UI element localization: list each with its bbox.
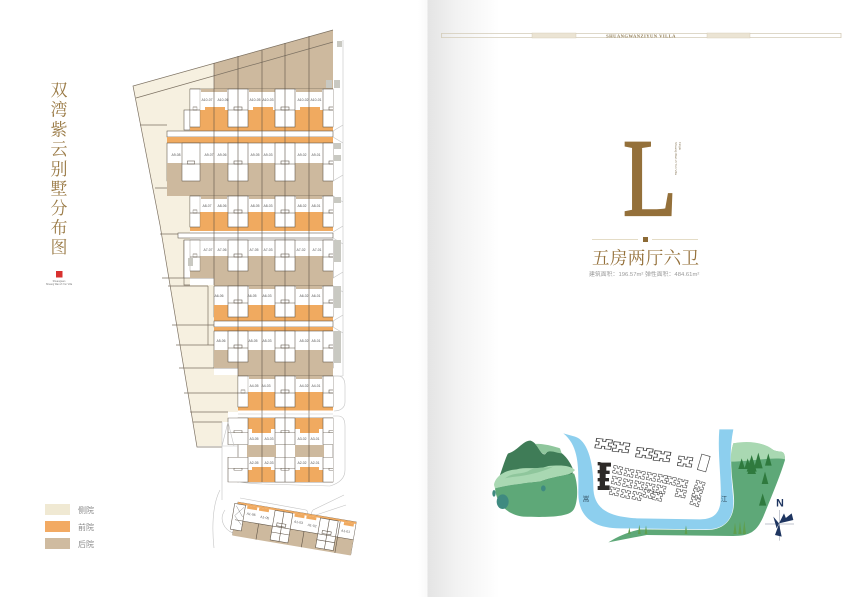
unit labels: A7-05: [249, 248, 259, 252]
orange front yards: [200, 107, 333, 482]
unit labels: A7-02: [296, 248, 306, 252]
unit labels: A9-08: [171, 153, 181, 157]
unit labels: A8-05: [250, 204, 260, 208]
row A1 rotated block: A1-06: [246, 512, 256, 517]
unit labels: A10-01: [311, 98, 322, 102]
unit labels: A7-07: [203, 248, 213, 252]
unit labels: A3-03: [264, 437, 274, 441]
unit labels: [171, 98, 322, 465]
unit labels: A6-02: [299, 294, 309, 298]
row A1 rotated block: A1-03: [294, 520, 303, 525]
logo seal: Shuangwan: [53, 280, 66, 283]
row A1 rotated block: A1-01: [341, 529, 351, 534]
right bank: [608, 442, 785, 542]
unit labels: A9-02: [297, 153, 307, 157]
plot boundary lines: [133, 30, 333, 447]
trees: [628, 453, 772, 534]
small vertical caption beside L: [674, 142, 682, 175]
unit labels: A10-03: [263, 98, 274, 102]
unit labels: A3-05: [249, 437, 259, 441]
legend: [45, 504, 94, 549]
unit labels: A4-03: [261, 384, 271, 388]
unit labels: A10-06: [218, 98, 229, 102]
header bar: [442, 33, 841, 38]
side yards (cream): [133, 63, 238, 446]
right page background with gutter shadow: [418, 0, 500, 597]
big letter L: L: [623, 117, 677, 239]
unit labels: A8-06: [217, 204, 227, 208]
unit labels: A7-01: [312, 248, 322, 252]
area figures: 建筑面积：196.57m² 弹性面积：484.61m²: [589, 270, 699, 278]
left hill: [492, 441, 577, 517]
brown back yards: [167, 89, 324, 457]
unit labels: A3-02: [297, 437, 307, 441]
logo seal: Shuang Wan Zi Yun Villa: [46, 283, 73, 286]
roads around the lower rows: [213, 376, 346, 548]
vertical title: villa distribution map: 双湾紫云别墅分布图: [50, 81, 68, 257]
row A1 rotated block: A1-05: [260, 515, 270, 520]
unit labels: A5-01: [311, 339, 321, 343]
row A1 rotated block: A1-02: [307, 523, 317, 528]
unit labels: A2-02: [297, 461, 307, 465]
unit labels: A5-06: [216, 339, 226, 343]
legend: front yard: 前院: [78, 522, 94, 532]
unit labels: A9-01: [311, 153, 321, 157]
unit labels: A6-06: [214, 294, 224, 298]
white stair blocks between units: [182, 89, 343, 482]
unit labels: A4-01: [311, 384, 321, 388]
logo seal: [46, 271, 73, 286]
compass: [765, 498, 794, 541]
back yard (top brown area): [214, 30, 333, 89]
row A1 rotated block: [229, 501, 356, 556]
unit labels: A8-03: [263, 204, 273, 208]
unit labels: A2-03: [264, 461, 274, 465]
heading: unit type: 五房两厅六卫: [592, 248, 699, 268]
unit labels: A10-02: [298, 98, 309, 102]
unit labels: A7-06: [217, 248, 227, 252]
unit labels: A8-01: [311, 204, 321, 208]
river labels: [583, 495, 728, 503]
legend: back yard: 后院: [78, 539, 94, 549]
unit labels: A6-03: [262, 294, 272, 298]
unit labels: A4-05: [249, 384, 259, 388]
location map: [492, 429, 794, 542]
unit labels: A9-03: [263, 153, 273, 157]
unit labels: A2-05: [249, 461, 259, 465]
unit labels: A9-05: [250, 153, 260, 157]
unit labels: A3-01: [310, 437, 320, 441]
unit labels: A5-05: [248, 339, 258, 343]
right side road details: [188, 40, 343, 376]
building footprints: [595, 438, 710, 507]
legend: side yard: 侧院: [78, 505, 94, 515]
row bases and yards: [167, 89, 333, 482]
river labels: 嵩: [583, 495, 589, 503]
divider with square: [592, 237, 698, 242]
site plan: [133, 30, 356, 556]
small vertical caption beside L: Shuang Wan Zi Yun Villa: [674, 142, 678, 175]
unit labels: A8-07: [202, 204, 212, 208]
header bar: SHUANGWANZIYUN VILLA: [606, 33, 676, 38]
unit labels: A4-02: [299, 384, 309, 388]
unit labels: A5-03: [262, 339, 272, 343]
unit labels: A8-02: [297, 204, 307, 208]
vertical unit grid lines: [214, 36, 309, 482]
compass: N: [776, 498, 784, 510]
unit labels: A6-05: [247, 294, 257, 298]
unit labels: A9-06: [217, 153, 227, 157]
unit labels: A9-07: [204, 153, 214, 157]
unit labels: A10-07: [202, 98, 213, 102]
unit labels: A10-05: [250, 98, 261, 102]
unit labels: A7-03: [263, 248, 273, 252]
unit labels: A6-01: [311, 294, 321, 298]
unit labels: A2-01: [310, 461, 320, 465]
unit labels: A5-02: [299, 339, 309, 343]
river labels: 江: [721, 495, 728, 503]
small vertical caption beside L: Fingle: [678, 142, 682, 151]
river: [563, 429, 733, 529]
